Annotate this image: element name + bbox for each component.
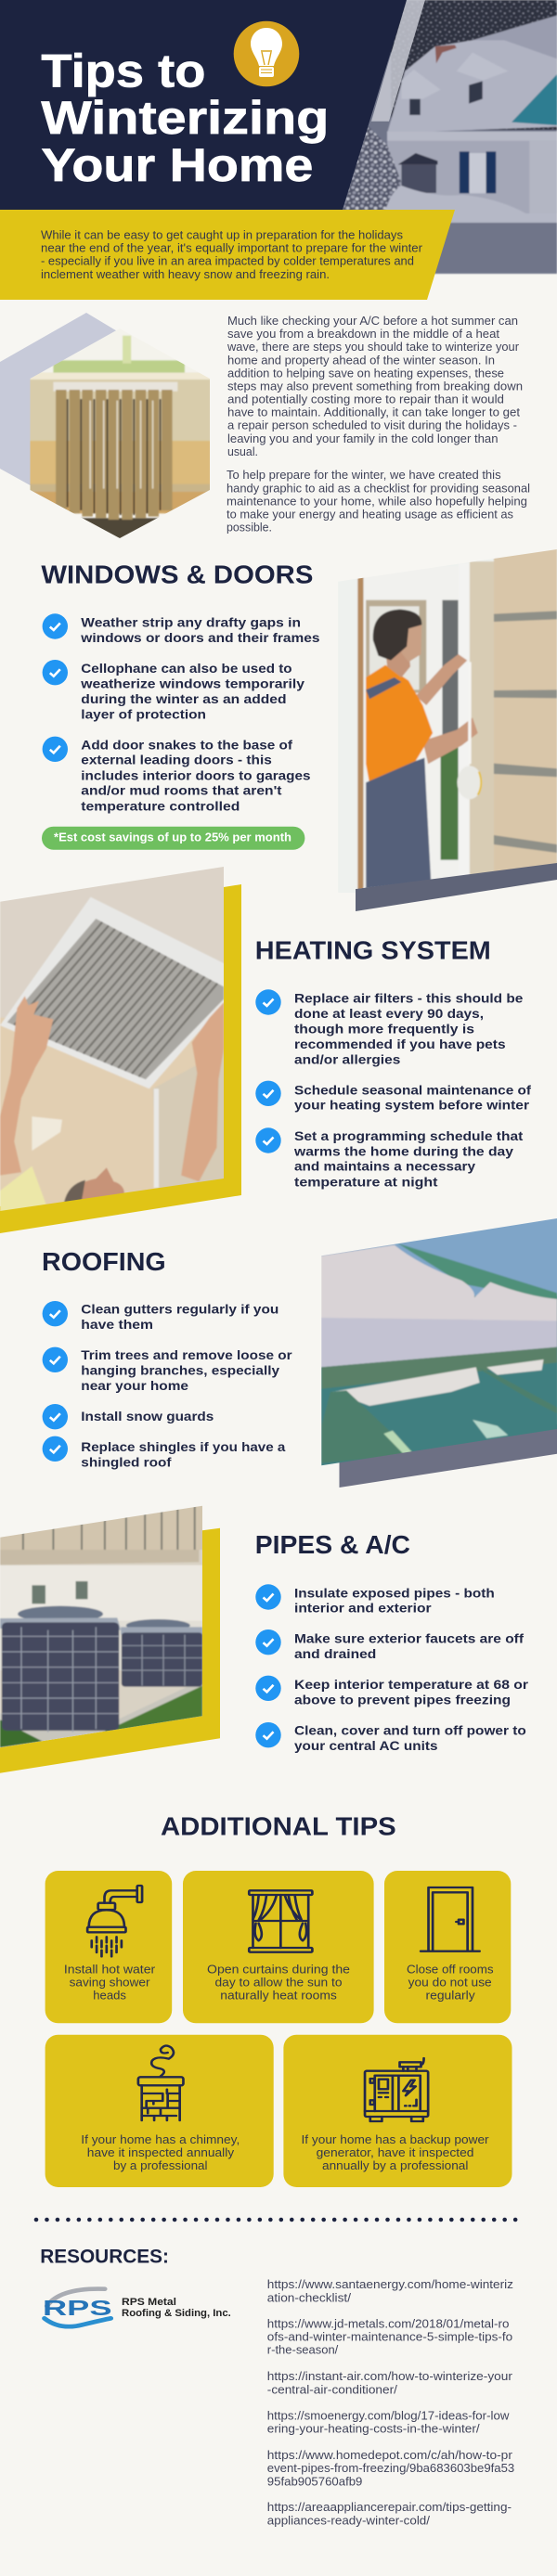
checklist: heating system: Set a programming schedule that [294, 1128, 524, 1143]
photo: snow on metal roof [319, 1216, 557, 1469]
resource links: appliances-ready-winter-cold/ [267, 2514, 431, 2527]
checklist: windows and doors: Add door snakes to the base of [81, 737, 292, 752]
panel: yellow backing [0, 1528, 220, 1773]
checklist: roofing: hanging branches, especially [81, 1362, 279, 1377]
intro paragraphs: to make your energy and heating usage as efficient as [227, 509, 513, 522]
icon: generator [365, 2058, 428, 2121]
intro text: While it can be easy to get caught up in preparation for the holidays [41, 228, 403, 241]
check icon [43, 1347, 68, 1372]
card: curtains: day to allow the sun to [215, 1977, 343, 1990]
icon: door [421, 1887, 480, 1951]
resource links: r-the-season/ [267, 2344, 339, 2357]
resource links: https://areaappliancerepair.com/tips-getting- [267, 2501, 512, 2514]
checklist: windows and doors: Weather strip any drafty gaps in [81, 615, 301, 630]
heading: roofing: ROOFING [42, 1247, 166, 1276]
card: close off rooms: Close off rooms [407, 1964, 494, 1977]
header title panel [0, 0, 425, 210]
card: curtains [183, 1871, 374, 2023]
checklist: pipes and ac: and drained [294, 1646, 376, 1661]
checklist: heating system: warms the home during the day [293, 1143, 513, 1158]
intro paragraphs: To help prepare for the winter, we have created this [227, 469, 501, 482]
logo: RPS Metal Roofing and Siding: RPS Metal [122, 2297, 176, 2308]
check icon [43, 1436, 68, 1462]
panel: yellow backing [0, 884, 241, 1233]
strip under roof photo [340, 1424, 557, 1488]
card: chimney [45, 2035, 274, 2187]
resource links: https://www.santaenergy.com/home-winteriz [267, 2278, 513, 2291]
resource links [267, 2278, 514, 2527]
intro paragraphs [227, 315, 530, 535]
checklist: pipes and ac: interior and exterior [294, 1601, 432, 1616]
photo: radiator [30, 330, 210, 538]
checklist: heating system: though more frequently is [294, 1022, 474, 1037]
photo: man fitting weather strip on door [338, 547, 557, 894]
card: close off rooms [384, 1871, 511, 2023]
card: chimney: have it inspected annually [87, 2146, 235, 2159]
intro paragraphs: have to maintain. Additionally, it can take longer to get [227, 406, 521, 419]
resource links: https://www.homedepot.com/c/ah/how-to-pr [267, 2449, 512, 2462]
checklist: roofing [43, 1301, 292, 1469]
checklist: heating system: recommended if you have pets [294, 1037, 506, 1051]
checklist: roofing: near your home [81, 1378, 188, 1393]
checklist: windows and doors: weatherize windows temporarily [80, 676, 304, 690]
checklist: roofing: Trim trees and remove loose or [81, 1347, 292, 1362]
checklist: windows and doors: external leading doors - this [81, 753, 272, 767]
logo: RPS Metal Roofing and Siding: Roofing & Siding, Inc. [122, 2308, 231, 2319]
card: close off rooms: regularly [425, 1990, 476, 2003]
resource links: https://www.jd-metals.com/2018/01/metal-ro [267, 2317, 509, 2330]
strip under door photo [356, 861, 557, 911]
check icon [255, 1584, 281, 1610]
card: chimney: If your home has a chimney, [81, 2133, 240, 2146]
callout: cost savings pill [42, 827, 304, 850]
title: Tips to [41, 45, 205, 97]
checklist: roofing: have them [81, 1317, 153, 1332]
card: shower heads: saving shower [70, 1977, 150, 1990]
resource links: 95fab905760afb9 [267, 2475, 362, 2488]
checklist: pipes and ac: your central AC units [294, 1738, 438, 1753]
header photo: snowy house [341, 0, 557, 274]
resource links: -central-air-conditioner/ [267, 2383, 397, 2396]
intro paragraphs: addition to helping save on heating expenses, these [227, 367, 504, 380]
checklist: windows and doors: includes interior doors to garages [81, 767, 311, 782]
checklist: pipes and ac: Clean, cover and turn off power to [294, 1723, 526, 1738]
checklist: windows and doors [43, 613, 320, 813]
title: Winterizing [41, 92, 329, 144]
checklist: windows and doors: windows or doors and their frames [80, 630, 320, 645]
card: shower heads [45, 1871, 172, 2023]
intro paragraphs: possible. [227, 522, 272, 535]
checklist: pipes and ac: Keep interior temperature at 68 or [294, 1677, 529, 1692]
intro text: - especially if you live in an area impacted by colder temperatures and [41, 255, 414, 268]
intro paragraphs: usual. [227, 445, 258, 458]
checklist: windows and doors: Cellophane can also be used to [81, 661, 292, 676]
card: close off rooms: you do not use [408, 1977, 492, 1990]
checklist: heating system: your heating system before winter [294, 1098, 530, 1113]
check icon [43, 660, 68, 685]
check icon [255, 1081, 281, 1106]
checklist: heating system: and maintains a necessary [294, 1159, 475, 1174]
icon: window with curtains [249, 1890, 312, 1952]
checklist: pipes and ac: above to prevent pipes freezing [294, 1693, 511, 1707]
photo: air conditioning units [0, 1503, 206, 1751]
checklist: roofing: Clean gutters regularly if you [81, 1302, 278, 1317]
heading: windows and doors: WINDOWS & DOORS [41, 560, 313, 588]
callout: cost savings pill: *Est cost savings of up to 25% per month [54, 831, 291, 844]
icon: chimney [138, 2046, 183, 2120]
resource links: event-pipes-from-freezing/9ba683603be9fa53 [267, 2462, 514, 2475]
icon: shower [87, 1886, 142, 1956]
card: backup generator: generator, have it inspected [317, 2146, 474, 2159]
card: backup generator [283, 2035, 512, 2187]
title: Your Home [41, 139, 313, 191]
heading: additional tips: ADDITIONAL TIPS [161, 1812, 396, 1841]
card: curtains: naturally heat rooms [220, 1990, 337, 2003]
intro paragraphs: handy graphic to aid as a checklist for providing seasonal [227, 482, 530, 495]
checklist: heating system: temperature at night [294, 1174, 438, 1189]
intro text: inclement weather with heavy snow and freezing rain. [41, 268, 330, 281]
resource links: https://instant-air.com/how-to-winterize-your [267, 2370, 512, 2383]
checklist: heating system [255, 989, 531, 1189]
intro paragraphs: steps may also prevent something from breaking down [227, 380, 523, 393]
intro paragraphs: a repair person scheduled to visit during the holidays - [227, 419, 517, 432]
icon: light bulb [234, 21, 299, 86]
check icon [43, 613, 68, 639]
resource links: ation-checklist/ [267, 2291, 352, 2304]
intro paragraphs: leaving you and your family in the cold longer than [227, 432, 499, 445]
intro paragraphs: maintenance to your home, while also hopefully helping [227, 495, 527, 508]
checklist: heating system: Replace air filters - this should be [294, 991, 524, 1006]
checklist: windows and doors: temperature controlled [81, 798, 240, 813]
heading: heating system: HEATING SYSTEM [255, 935, 491, 964]
intro text [41, 228, 422, 281]
card: shower heads: Install hot water [64, 1964, 155, 1977]
card: backup generator: annually by a professional [322, 2159, 468, 2172]
check icon [43, 1301, 68, 1326]
intro paragraphs: Much like checking your A/C before a hot summer can [227, 315, 518, 328]
checklist: roofing: Install snow guards [81, 1409, 214, 1423]
heading: resources: RESOURCES: [40, 2245, 169, 2267]
heading: pipes and ac: PIPES & A/C [255, 1530, 410, 1559]
check icon [255, 1722, 281, 1747]
intro paragraphs: wave, there are steps you should take to winterize your [227, 341, 519, 354]
check icon [43, 1404, 68, 1429]
panel: yellow intro [0, 210, 455, 300]
checklist: roofing: shingled roof [81, 1454, 172, 1469]
check icon [43, 737, 68, 762]
photo: hands replacing air filter [0, 863, 227, 1216]
resource links: ering-your-heating-costs-in-the-winter/ [267, 2423, 480, 2436]
checklist: windows and doors: and/or mud rooms that aren't [81, 783, 282, 798]
check icon [255, 1127, 281, 1153]
intro paragraphs: save you from a breakdown in the middle of a heat [227, 328, 500, 341]
checklist: pipes and ac [255, 1584, 529, 1753]
check icon [255, 1676, 281, 1701]
checklist: windows and doors: layer of protection [81, 706, 206, 721]
logo: RPS Metal Roofing and Siding: RPS [43, 2296, 111, 2320]
checklist: roofing: Replace shingles if you have a [81, 1439, 286, 1454]
resource links: https://smoenergy.com/blog/17-ideas-for-low [267, 2409, 510, 2422]
card: curtains: Open curtains during the [207, 1964, 350, 1977]
logo: RPS Metal Roofing and Siding [43, 2289, 231, 2326]
intro paragraphs: and potentially costing more to repair than it would [227, 393, 504, 406]
intro paragraphs: home and property ahead of the winter season. In [227, 354, 495, 367]
card: chimney: by a professional [113, 2159, 208, 2172]
card: backup generator: If your home has a backup power [301, 2133, 489, 2146]
checklist: pipes and ac: Make sure exterior faucets are off [294, 1631, 524, 1646]
checklist: windows and doors: during the winter as an added [81, 691, 286, 706]
checklist: heating system: and/or allergies [294, 1052, 401, 1067]
intro text: near the end of the year, it's equally important to prepare for the winter [41, 242, 422, 255]
checklist: heating system: Schedule seasonal maintenance of [294, 1082, 531, 1097]
title [41, 45, 329, 191]
card: shower heads: heads [93, 1990, 126, 2003]
resource links: ofs-and-winter-maintenance-5-simple-tips-fo [267, 2331, 512, 2344]
checklist: pipes and ac: Insulate exposed pipes - both [294, 1585, 495, 1600]
check icon [255, 1629, 281, 1655]
checklist: heating system: done at least every 90 days, [294, 1006, 484, 1021]
check icon [255, 989, 281, 1015]
